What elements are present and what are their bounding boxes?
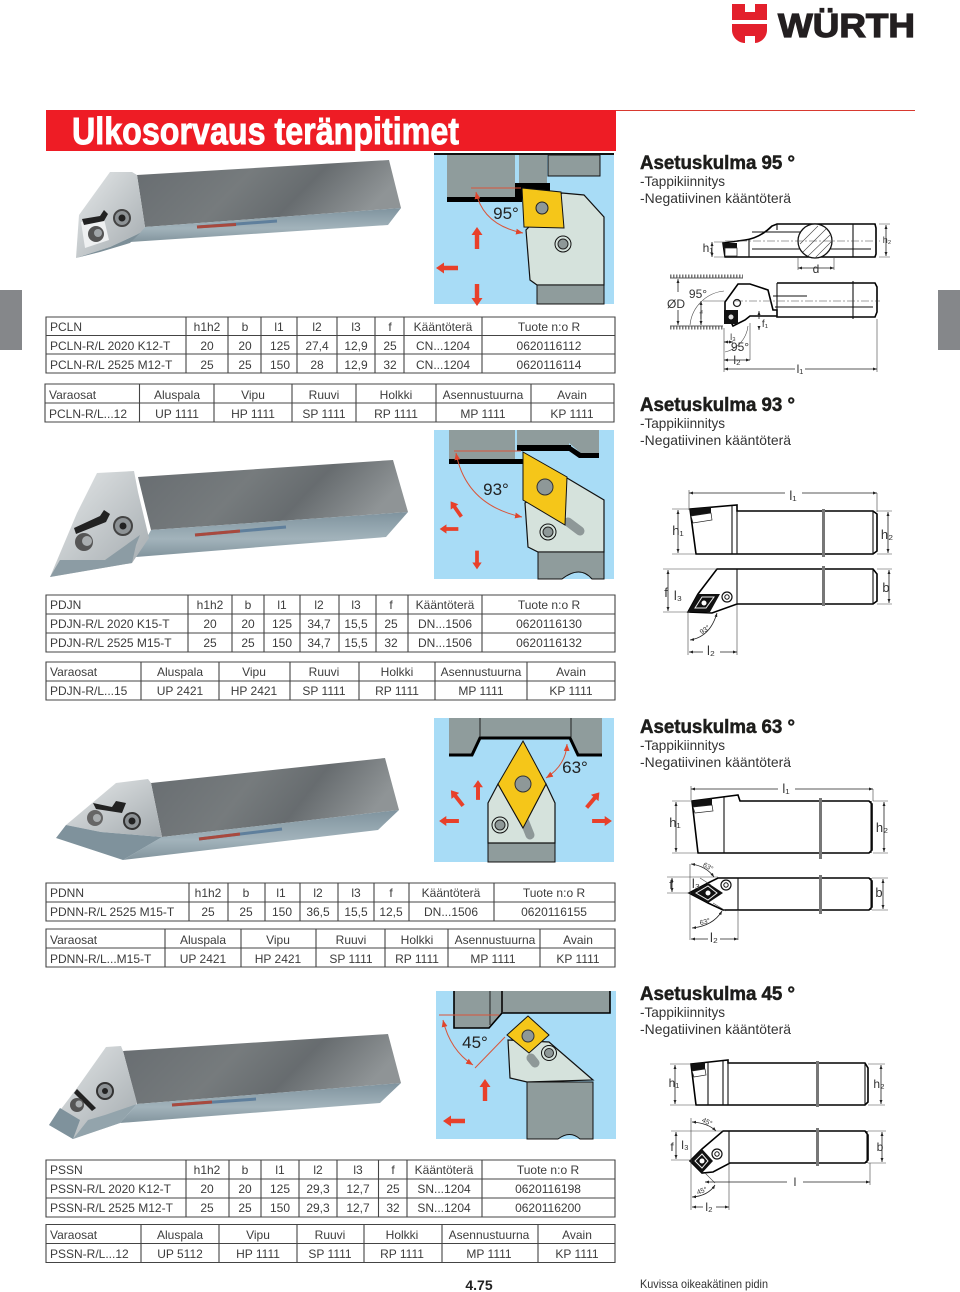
table: PDNN spare parts: UP 2421 [180,952,227,966]
heading: setting angle 95 [640,153,795,206]
table: PSSN: 32 [386,1201,400,1215]
table: PSSN: 29,3 [306,1201,330,1215]
table: PDNN spare parts: Aluspala [180,933,226,947]
table: PDNN: l2 [313,886,323,900]
table: PCLN spare parts: Holkki [380,388,412,402]
table: PDJN: 0620116130 [516,617,582,631]
table: PCLN: CN...1204 [416,339,470,353]
technical drawing: boring bar 95 degrees [667,224,892,376]
table: PDNN: 15,5 [344,905,368,919]
table: PSSN: PSSN-R/L 2525 M12-T [50,1201,174,1215]
table: PDNN: 150 [272,905,292,919]
table: PDNN: Kääntöterä [422,886,481,900]
heading: setting angle 45: Asetuskulma 45 ° [640,984,795,1005]
table: PCLN: 25 [200,358,214,372]
table: PCLN: 32 [383,358,397,372]
table: PDJN: 34,7 [307,636,331,650]
table: PDNN: 12,5 [379,905,403,919]
table: PCLN spare parts: SP 1111 [302,407,346,421]
table: PCLN spare parts: RP 1111 [374,407,418,421]
table: PDNN: 36,5 [306,905,330,919]
photo: PDNN tool holder [56,758,399,860]
table: PDNN spare parts: Asennustuurna [455,933,536,947]
heading: setting angle 63: -Tappikiinnitys [640,737,725,753]
diagram: 45 degree setting [436,991,616,1139]
table: PSSN: PSSN [50,1163,83,1177]
table: PSSN spare parts [46,1224,615,1262]
table: PDNN spare parts: SP 1111 [329,952,373,966]
table: PSSN: 20 [200,1182,214,1196]
table: PDJN spare parts: PDJN-R/L...15 [50,684,128,698]
table: PCLN: b [242,320,249,334]
table: PDJN: 0620116132 [516,636,582,650]
technical drawing: 45 degree holder: 45° [696,1185,709,1197]
technical drawing: 45 degree holder: 45° [701,1116,714,1128]
technical drawing: 93 degree holder: l₂ [707,643,715,658]
technical drawing: 45 degree holder [669,1060,886,1214]
table: PCLN spare parts: Avain [557,388,587,402]
table: PCLN spare parts: MP 1111 [460,407,506,421]
technical drawing: 93 degree holder: 93° [698,624,712,636]
diagram: 63 degree setting [434,718,614,862]
table: PSSN: 29,3 [306,1182,330,1196]
technical drawing: boring bar 95 degrees: f [699,308,703,322]
table: PCLN: l1 [274,320,284,334]
table: PDJN: f [389,598,393,612]
table: PSSN: h1h2 [194,1163,221,1177]
heading: setting angle 93: -Negatiivinen kääntöterä [640,432,791,448]
table: PCLN spare parts: HP 1111 [231,407,275,421]
technical drawing: 63 degree holder: l₁ [782,781,790,796]
table: PDJN: PDJN-R/L 2525 M15-T [50,636,172,650]
heading: setting angle 95: -Tappikiinnitys [640,173,725,189]
table: PDNN: f [389,886,393,900]
table: PSSN: 20 [238,1182,252,1196]
table: PCLN spare parts: KP 1111 [550,407,594,421]
heading: setting angle 45: -Negatiivinen kääntöterä [640,1021,791,1037]
photo: PDJN tool holder [50,460,408,577]
table: PCLN: 25 [383,339,397,353]
table: PSSN spare parts: RP 1111 [380,1247,424,1261]
table: PDJN: 125 [272,617,292,631]
heading: setting angle 63 [640,717,795,770]
table: PDNN: h1h2 [195,886,222,900]
technical drawing: boring bar 95 degrees: h₁ [703,241,713,255]
table: PDJN spare parts: SP 1111 [302,684,346,698]
table: PSSN: 150 [270,1201,290,1215]
table: PSSN: SN...1204 [417,1201,471,1215]
table: PDNN spare parts: HP 2421 [255,952,302,966]
table: PDNN spare parts: Vipu [266,933,290,947]
diagram: 95 degree setting: 95° [493,204,519,223]
table: PDJN [46,595,615,652]
table: PDJN: l3 [351,598,361,612]
heading: setting angle 93 [640,395,795,448]
table: PDJN: 25 [384,617,398,631]
technical drawing: 45 degree holder: b [877,1140,884,1154]
side tab: left [0,290,22,350]
technical drawing: 93 degree holder: h₂ [881,527,893,542]
table: PDJN: l2 [314,598,324,612]
technical drawing: 63 degree holder [667,781,888,945]
photo: PSSN tool holder [49,1034,401,1139]
table: PSSN: b [242,1163,249,1177]
table: PSSN spare parts: Asennustuurna [449,1228,530,1242]
diagram: 95 degree setting [434,153,614,306]
table: PDJN spare parts: Avain [556,665,586,679]
table: PDNN spare parts: Varaosat [50,933,98,947]
table: PSSN: PSSN-R/L 2020 K12-T [50,1182,172,1196]
table: PDNN spare parts: Ruuvi [336,933,366,947]
technical drawing: 63 degree holder: f [669,877,673,892]
table: PSSN: 12,7 [346,1182,370,1196]
table: PDJN spare parts: Aluspala [157,665,203,679]
technical drawing: boring bar 95 degrees: l₁ [797,362,803,376]
table: PSSN spare parts: Holkki [386,1228,418,1242]
table: PCLN spare parts: Varaosat [49,388,97,402]
table: PCLN [46,317,615,373]
technical drawing: 45 degree holder: h₂ [873,1077,885,1091]
technical drawing: 63 degree holder: h₁ [669,815,681,830]
table: PDJN spare parts: Vipu [242,665,266,679]
table: PSSN: 0620116200 [515,1201,581,1215]
technical drawing: 93 degree holder: b [882,580,890,595]
table: PSSN spare parts: HP 1111 [236,1247,280,1261]
diagram: 93 degree setting [434,430,614,579]
table: PDJN: 34,7 [307,617,331,631]
table: PDJN: PDJN [50,598,81,612]
table: PDNN: 0620116155 [521,905,587,919]
table: PSSN [46,1160,615,1217]
side tab: right [938,290,960,350]
table: PDJN: l1 [277,598,287,612]
table: PCLN spare parts: PCLN-R/L...12 [49,407,127,421]
table: PDJN: DN...1506 [418,617,472,631]
technical drawing: boring bar 95 degrees: d [813,262,819,276]
table: PSSN spare parts: PSSN-R/L...12 [50,1247,129,1261]
table: PCLN: l2 [312,320,322,334]
table: PSSN spare parts: Ruuvi [315,1228,345,1242]
table: PDJN: 150 [272,636,292,650]
table: PCLN: Kääntöterä [414,320,473,334]
table: PDJN: 25 [241,636,255,650]
table: PDJN spare parts: RP 1111 [375,684,419,698]
table: PDNN: Tuote n:o R [523,886,585,900]
photo: PCLN tool holder [76,160,401,258]
technical drawing: boring bar 95 degrees: 95° [689,287,707,301]
table: PDJN: 20 [241,617,255,631]
table: PSSN: 0620116198 [515,1182,581,1196]
table: PCLN: CN...1204 [416,358,470,372]
table: PCLN: 150 [270,358,290,372]
table: PDJN spare parts: MP 1111 [458,684,504,698]
table: PCLN spare parts: Asennustuurna [443,388,524,402]
table: PDNN: PDNN [50,886,84,900]
table: PDNN spare parts: MP 1111 [470,952,516,966]
technical drawing: 93 degree holder [663,488,893,658]
table: PDNN: b [243,886,250,900]
table: PSSN: f [391,1163,395,1177]
logo: Würth: WÜRTH [778,7,915,44]
technical drawing: 45 degree holder: f [670,1140,674,1154]
table: PSSN spare parts: Vipu [246,1228,270,1242]
table: PCLN spare parts: Ruuvi [309,388,339,402]
technical drawing: 63 degree holder: 63° [701,861,715,873]
technical drawing: 93 degree holder: f [664,585,668,600]
table: PSSN spare parts: KP 1111 [555,1247,599,1261]
technical drawing: 45 degree holder: l₃ [681,1138,689,1152]
table: PCLN: Tuote n:o R [518,320,580,334]
table: PCLN: f [388,320,392,334]
footnote: Kuvissa oikeakätinen pidin [640,1277,768,1291]
heading: setting angle 63: -Negatiivinen kääntöterä [640,754,791,770]
table: PCLN: PCLN-R/L 2525 M12-T [50,358,173,372]
table: PDJN spare parts: Varaosat [50,665,98,679]
table: PSSN: 25 [238,1201,252,1215]
table: PDJN spare parts [46,662,615,700]
table: PDJN: Tuote n:o R [518,598,580,612]
table: PSSN: l1 [275,1163,285,1177]
table: PCLN spare parts: UP 1111 [155,407,199,421]
table: PCLN: 12,9 [344,339,368,353]
table: PDJN: h1h2 [197,598,224,612]
table: PDJN spare parts: KP 1111 [549,684,593,698]
table: PDJN spare parts: UP 2421 [157,684,204,698]
table: PDJN spare parts: Ruuvi [309,665,339,679]
table: PCLN: 28 [310,358,324,372]
table: PDNN spare parts [46,929,615,967]
table: PCLN: 0620116114 [517,358,582,372]
table: PSSN spare parts: Aluspala [157,1228,203,1242]
technical drawing: 45 degree holder: h₁ [669,1076,679,1090]
table: PCLN: 20 [200,339,214,353]
table: PCLN spare parts: Aluspala [154,388,200,402]
table: PSSN: 125 [270,1182,290,1196]
table: PDJN spare parts: Asennustuurna [441,665,522,679]
technical drawing: 63 degree holder: b [875,885,883,900]
table: PDNN: l3 [351,886,361,900]
table: PDNN: 25 [239,905,253,919]
table: PDJN: 25 [203,636,217,650]
table: PSSN spare parts: Varaosat [50,1228,98,1242]
heading: setting angle 45: -Tappikiinnitys [640,1004,725,1020]
table: PSSN: 25 [200,1201,214,1215]
table: PDNN spare parts: RP 1111 [395,952,439,966]
technical drawing: 63 degree holder: l₃ [692,876,700,891]
technical drawing: 93 degree holder: l₃ [674,588,682,603]
technical drawing: 63 degree holder: l₂ [710,930,718,945]
technical drawing: 45 degree holder: l₂ [705,1200,713,1214]
table: PDNN: l1 [276,886,286,900]
technical drawing: 93 degree holder: h₁ [672,523,684,538]
table: PDJN: DN...1506 [418,636,472,650]
table: PCLN: 12,9 [344,358,368,372]
table: PCLN: 25 [238,358,252,372]
table: PSSN: l2 [313,1163,323,1177]
technical drawing: boring bar 95 degrees: ØD [667,297,685,311]
title banner: Ulkosorvaus teränpitimet [72,111,459,153]
table: PDNN spare parts: Avain [563,933,593,947]
table: PSSN: Tuote n:o R [517,1163,579,1177]
table: PDJN spare parts: HP 2421 [231,684,278,698]
technical drawing: 45 degree holder: l [794,1175,796,1189]
table: PCLN: 27,4 [305,339,329,353]
table: PCLN spare parts [45,384,614,422]
technical drawing: 63 degree holder: h₂ [876,820,888,835]
table: PDJN: PDJN-R/L 2020 K15-T [50,617,170,631]
technical drawing: boring bar 95 degrees: h₂ [883,235,892,245]
table: PDJN: Kääntöterä [416,598,475,612]
table: PDNN spare parts: KP 1111 [556,952,600,966]
heading: setting angle 45 [640,984,795,1037]
table: PCLN: l3 [351,320,361,334]
technical drawing: 63 degree holder: 63° [699,917,711,927]
table: PSSN spare parts: MP 1111 [466,1247,512,1261]
table: PCLN: 125 [270,339,290,353]
table: PDJN: b [245,598,252,612]
table: PCLN: h1h2 [194,320,221,334]
technical drawing: 93 degree holder: l₁ [789,488,797,503]
technical drawing: boring bar 95 degrees: l₂ [733,353,741,367]
table: PDNN spare parts: PDNN-R/L...M15-T [50,952,152,966]
logo: Würth [732,4,915,44]
table: PCLN: 0620116112 [517,339,582,353]
table: PDNN [46,883,615,921]
title banner [46,110,915,153]
table: PCLN spare parts: Vipu [241,388,265,402]
table: PDJN spare parts: Holkki [381,665,413,679]
table: PSSN: SN...1204 [417,1182,471,1196]
diagram: 63 degree setting: 63° [562,758,588,777]
technical drawing: boring bar 95 degrees: l₃ [730,332,736,342]
table: PDNN spare parts: Holkki [401,933,433,947]
table: PCLN: PCLN [50,320,82,334]
diagram: 93 degree setting: 93° [483,480,509,499]
heading: setting angle 95: -Negatiivinen kääntöterä [640,190,791,206]
table: PDJN: 20 [203,617,217,631]
heading: setting angle 93: Asetuskulma 93 ° [640,395,795,416]
table: PDNN: DN...1506 [424,905,478,919]
table: PSSN spare parts: SP 1111 [308,1247,352,1261]
heading: setting angle 95: Asetuskulma 95 ° [640,153,795,174]
table: PSSN spare parts: UP 5112 [157,1247,203,1261]
table: PSSN: 12,7 [346,1201,370,1215]
table: PDJN: 15,5 [344,636,368,650]
table: PDNN: PDNN-R/L 2525 M15-T [50,905,175,919]
table: PSSN: 25 [386,1182,400,1196]
table: PSSN: l3 [353,1163,363,1177]
table: PCLN: 20 [238,339,252,353]
heading: setting angle 63: Asetuskulma 63 ° [640,717,795,738]
table: PDJN: 15,5 [344,617,368,631]
heading: setting angle 93: -Tappikiinnitys [640,415,725,431]
diagram: 45 degree setting: 45° [462,1033,488,1052]
table: PDJN: 32 [384,636,398,650]
technical drawing: boring bar 95 degrees: 95° [731,340,749,354]
table: PDNN: 25 [201,905,215,919]
table: PSSN spare parts: Avain [562,1228,592,1242]
table: PCLN: PCLN-R/L 2020 K12-T [50,339,171,353]
technical drawing: boring bar 95 degrees: f₁ [762,319,769,330]
table: PSSN: Kääntöterä [415,1163,474,1177]
